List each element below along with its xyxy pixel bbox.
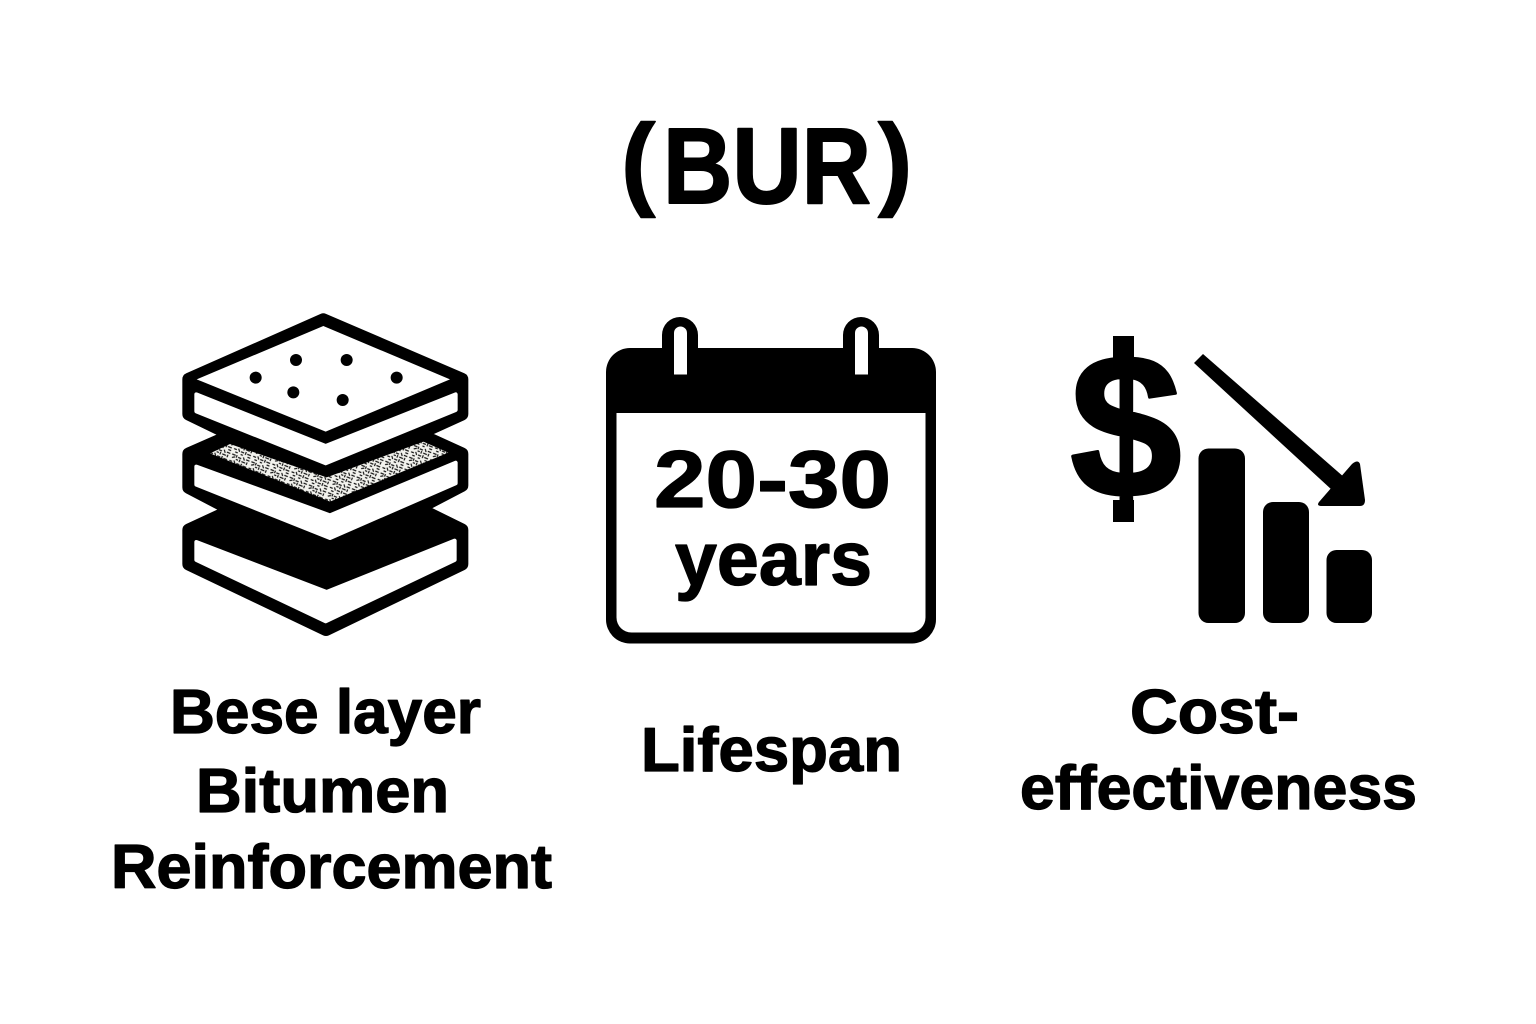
label: layers: Bese layer (170, 678, 481, 747)
label: cost-effectiveness (1020, 678, 1417, 823)
lifespan value: 20-30 (654, 435, 891, 525)
icon: stacked roof layers (189, 320, 462, 629)
calendar body (606, 348, 936, 644)
label: cost-effectiveness: Cost- (1130, 678, 1299, 747)
bottom layer side (196, 541, 455, 621)
declining arrow (1194, 354, 1365, 506)
icon: cost decrease (1070, 312, 1372, 623)
label: cost-effectiveness: effectiveness (1020, 754, 1417, 823)
bars (1198, 448, 1372, 623)
layers silhouette (189, 320, 462, 629)
calendar page (616, 413, 926, 632)
label: lifespan: Lifespan (641, 716, 902, 785)
label: layers: Bitumen (196, 757, 449, 826)
title: ) (878, 103, 912, 218)
label: layers (111, 678, 552, 902)
dollar sign: $ (1070, 312, 1182, 541)
years unit: years (675, 517, 872, 602)
label: layers: Reinforcement (111, 833, 552, 902)
gravel dots (250, 354, 403, 406)
calendar rings (662, 317, 879, 377)
middle layer side (196, 463, 456, 538)
ring slots (674, 326, 868, 374)
top layer side (196, 394, 456, 463)
reinforcement layer fabric (207, 440, 450, 503)
title: BUR (663, 105, 871, 226)
top layer face (197, 326, 450, 432)
title: ( (621, 103, 656, 218)
icon: calendar (606, 317, 936, 644)
